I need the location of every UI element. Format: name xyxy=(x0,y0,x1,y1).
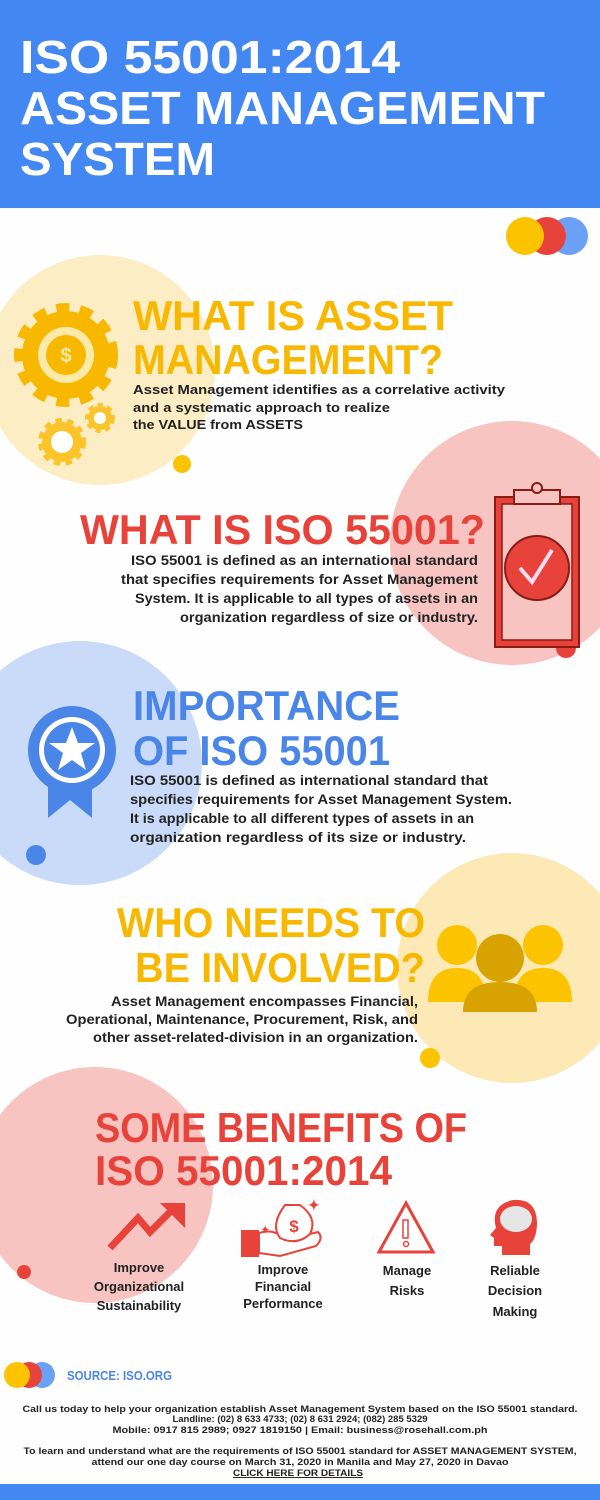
text block: System. It is applicable to all types of assets in an xyxy=(135,591,478,606)
benefit label 3: Manage xyxy=(383,1263,431,1278)
benefit label 2: Financial xyxy=(255,1279,311,1294)
title: ISO 55001:2014 xyxy=(20,31,400,83)
footer contact text: CLICK HERE FOR DETAILS xyxy=(233,1468,363,1479)
text block: organization regardless of its size or industry. xyxy=(130,830,466,845)
text block: ISO 55001 is defined as an international standard xyxy=(131,553,478,568)
benefit label 4 xyxy=(488,1263,542,1319)
footer contact text: Landline: (02) 8 633 4733; (02) 8 631 2924; (082) 285 5329 xyxy=(172,1414,428,1425)
icon: warning xyxy=(379,1203,433,1252)
icon: badge xyxy=(28,706,116,818)
heading: WHO NEEDS TO xyxy=(117,899,425,946)
icon: growth arrow xyxy=(110,1203,185,1248)
heading xyxy=(95,1104,467,1194)
benefit label 4: Making xyxy=(493,1304,537,1319)
header banner xyxy=(0,0,600,208)
heading: WHAT IS ASSET xyxy=(133,292,453,339)
text block: It is applicable to all different types of assets in an xyxy=(130,811,474,826)
benefit label 3: Risks xyxy=(390,1283,424,1298)
text block xyxy=(133,382,506,432)
benefit label 1: Organizational xyxy=(94,1279,184,1294)
benefit label 1 xyxy=(94,1260,184,1313)
heading xyxy=(133,682,400,774)
heading: OF ISO 55001 xyxy=(133,727,390,774)
text block xyxy=(121,553,479,625)
heading xyxy=(117,899,425,991)
heading: IMPORTANCE xyxy=(133,682,400,729)
text block: and a systematic approach to realize xyxy=(133,400,390,415)
benefit label 1: Improve xyxy=(114,1260,164,1275)
footer contact text: To learn and understand what are the requirements of ISO 55001 standard for ASSET MANAGEMENT SYSTEM, xyxy=(24,1446,576,1457)
icon: head xyxy=(490,1200,537,1255)
icon: money hand: $ xyxy=(289,1217,299,1236)
benefit label 2: Improve xyxy=(258,1262,308,1277)
footer contact text xyxy=(22,1404,578,1479)
benefit label 2 xyxy=(243,1262,323,1311)
benefit label 2: Performance xyxy=(243,1296,323,1311)
heading: ISO 55001:2014 xyxy=(95,1147,393,1194)
heading: SOME BENEFITS OF xyxy=(95,1104,467,1151)
text block xyxy=(66,994,418,1045)
text block xyxy=(130,773,512,845)
text block: organization regardless of size or industry. xyxy=(180,610,478,625)
benefit label 3 xyxy=(383,1263,431,1298)
bottom bar xyxy=(0,1484,600,1500)
panel: benefits xyxy=(0,1067,542,1319)
text block: Operational, Maintenance, Procurement, Risk, and xyxy=(66,1012,418,1027)
heading: MANAGEMENT? xyxy=(133,336,443,383)
icon: gears xyxy=(22,311,112,462)
icon: people xyxy=(428,925,572,1012)
panel: who needs to be involved xyxy=(66,853,600,1083)
text block: ISO 55001 is defined as international standard that xyxy=(130,773,489,788)
heading: BE INVOLVED? xyxy=(135,944,425,991)
heading: WHAT IS ISO 55001? xyxy=(80,506,485,553)
title: ASSET MANAGEMENT xyxy=(20,82,545,134)
title xyxy=(20,31,545,185)
benefit label 4: Decision xyxy=(488,1283,542,1298)
panel: what is iso 55001 xyxy=(80,421,600,665)
text block: specifies requirements for Asset Management System. xyxy=(130,792,512,807)
heading xyxy=(133,292,453,383)
icon: money hand: ✦ xyxy=(261,1225,269,1236)
icon: clipboard xyxy=(495,483,579,647)
panel: what is asset management xyxy=(0,255,506,485)
footer contact text: Mobile: 0917 815 2989; 0927 1819150 | Email: business@rosehall.com.ph xyxy=(112,1425,488,1436)
text block: Asset Management identifies as a correlative activity xyxy=(133,382,506,397)
benefit label 1: Sustainability xyxy=(97,1298,182,1313)
text block: other asset-related-division in an organization. xyxy=(93,1030,418,1045)
decorative dots top xyxy=(506,217,588,255)
title: SYSTEM xyxy=(20,133,215,185)
text block: that specifies requirements for Asset Management xyxy=(121,572,479,587)
footer contact text: attend our one day course on March 31, 2020 in Manila and May 27, 2020 in Davao xyxy=(92,1457,509,1468)
text block: Asset Management encompasses Financial, xyxy=(111,994,418,1009)
text block: the VALUE from ASSETS xyxy=(133,417,303,432)
panel: importance xyxy=(0,641,512,885)
icon: gears: $ xyxy=(60,345,72,367)
benefit label 4: Reliable xyxy=(490,1263,540,1278)
footer contact text: Call us today to help your organization establish Asset Management System based on the ISO 55001 standard. xyxy=(22,1404,578,1415)
icon: money hand xyxy=(241,1197,321,1257)
source xyxy=(4,1362,172,1388)
icon: money hand: ✦ xyxy=(308,1197,320,1213)
source: SOURCE: ISO.ORG xyxy=(67,1368,172,1383)
